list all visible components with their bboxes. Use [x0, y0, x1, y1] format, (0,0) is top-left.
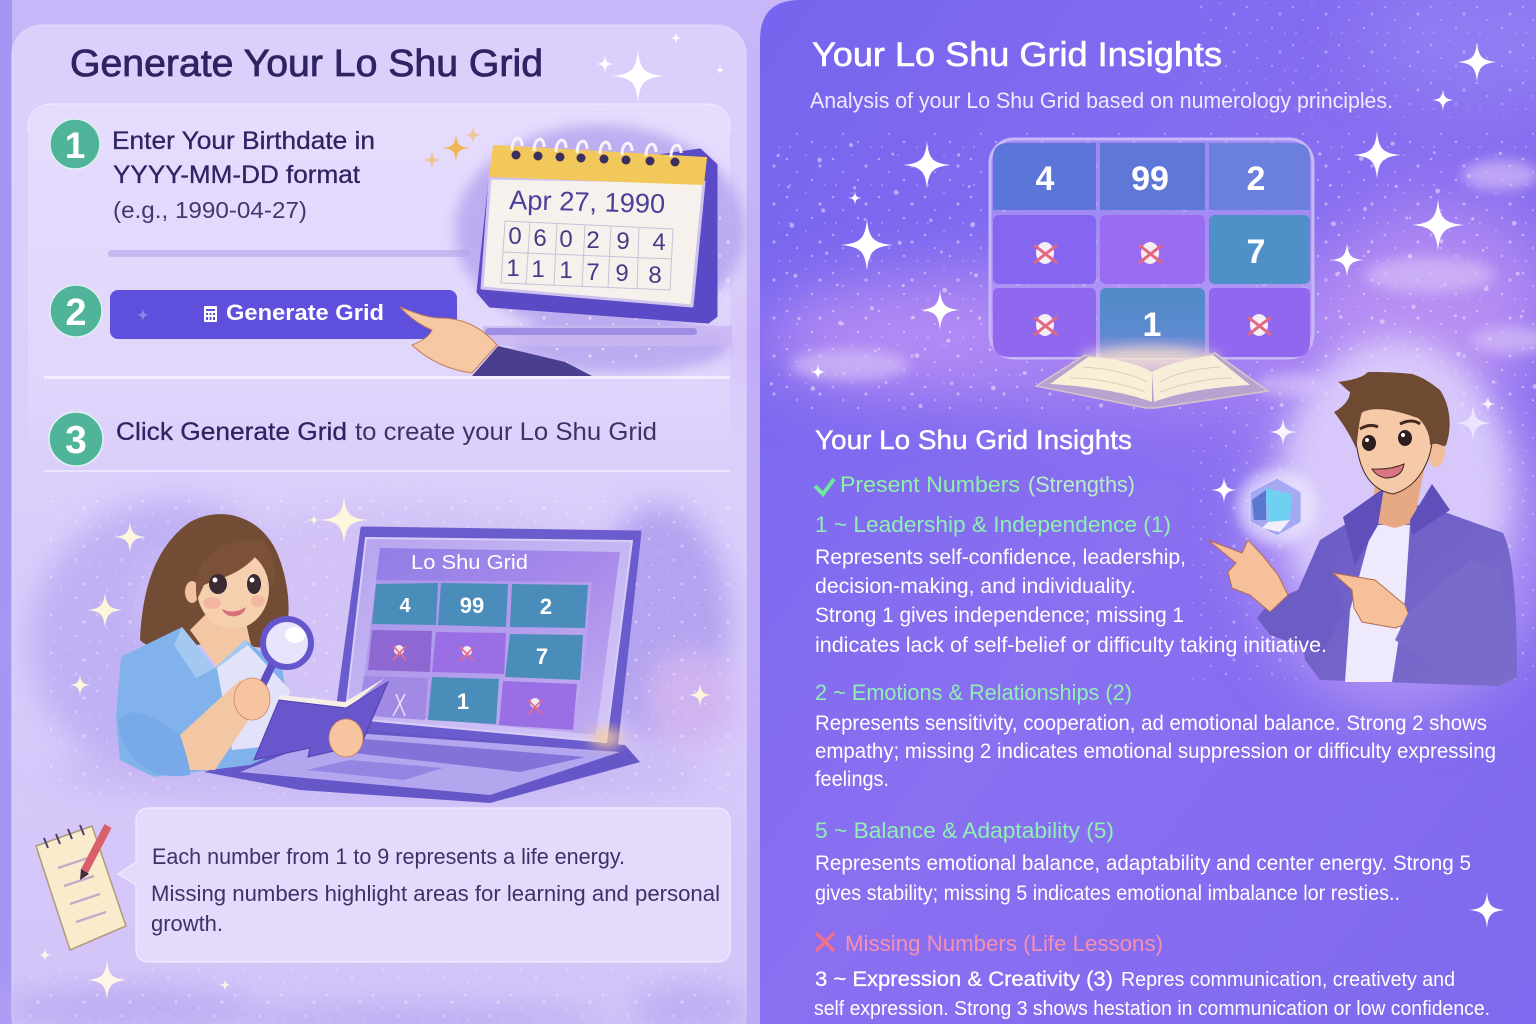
missing cell — [432, 632, 506, 674]
girl eyes — [209, 574, 261, 594]
panel subheading: Analysis of your Lo Shu Grid based on numerology principles. — [810, 88, 1393, 113]
number 5 insight — [815, 818, 1471, 905]
hair — [1334, 372, 1450, 448]
cell 4: 4 — [1036, 160, 1055, 198]
girl neck — [190, 615, 252, 668]
star dust — [770, 0, 1536, 680]
girl cheeks — [203, 595, 265, 609]
girl hand on magnifier — [234, 678, 270, 720]
background cloud — [30, 500, 735, 803]
book pages — [278, 678, 385, 708]
present cell 4 — [372, 583, 438, 625]
cell 1 — [1100, 288, 1205, 358]
number 5 text — [815, 852, 1471, 905]
left sleeve — [1257, 540, 1345, 653]
calendar digits: 1 — [531, 256, 545, 283]
pointing hand right — [1333, 573, 1412, 628]
jacket body — [1300, 505, 1517, 686]
small gold sparkles — [422, 126, 482, 170]
calendar digits: 0 — [559, 226, 573, 253]
cell 7 — [1209, 215, 1310, 284]
trackpad — [307, 760, 443, 780]
screen corner glow — [590, 728, 622, 748]
calendar digits: 8 — [648, 262, 662, 289]
calendar digits: 9 — [615, 260, 629, 287]
number 1 heading: 1 ~ Leadership & Independence (1) — [815, 512, 1171, 537]
section heading: Your Lo Shu Grid Insights — [815, 425, 1132, 455]
step 3 badge: 3 — [65, 419, 87, 462]
calendar ring holes — [512, 150, 680, 166]
grid frame — [362, 580, 592, 732]
laptop base — [204, 725, 640, 803]
calendar rings — [512, 138, 681, 157]
crystal cube — [1237, 469, 1317, 545]
cell 2 — [1209, 143, 1310, 210]
divider — [44, 470, 730, 472]
eyes — [1362, 430, 1412, 451]
present cell 99: 99 — [460, 593, 484, 618]
missing numbers label: Missing Numbers (Life Lessons) — [845, 931, 1163, 956]
laptop deck — [240, 732, 620, 795]
girl hair back — [140, 514, 289, 648]
missing cell row 3 right — [1209, 288, 1310, 357]
calendar digits: 0 — [508, 223, 522, 250]
calendar digits: 9 — [616, 228, 630, 255]
missing numbers heading — [816, 931, 1163, 956]
cell 99: 99 — [1131, 160, 1169, 198]
laptop lid — [335, 528, 640, 750]
present cell 2 — [510, 584, 588, 628]
girl ear — [185, 581, 199, 603]
book pages left — [1050, 357, 1152, 402]
number 5 text: gives stability; missing 5 indicates emotional imbalance lor resties.. — [815, 882, 1400, 905]
girl eye highlights — [212, 578, 254, 582]
pointing hand — [400, 307, 592, 376]
number 1 text: decision-making, and individuality. — [815, 575, 1136, 598]
girl white inner — [217, 645, 290, 750]
open book — [1036, 346, 1268, 408]
panel background — [12, 25, 746, 1024]
number 5 heading: 5 ~ Balance & Adaptability (5) — [815, 818, 1114, 843]
step 2 badge: 2 — [65, 292, 87, 334]
keyboard — [345, 738, 585, 772]
number 1 insight — [815, 512, 1327, 657]
number 2 heading: 2 ~ Emotions & Relationships (2) — [815, 680, 1132, 705]
present cell 99 — [438, 583, 508, 627]
face — [1355, 402, 1433, 494]
note line 3: growth. — [151, 911, 223, 936]
cell 7: 7 — [1247, 233, 1265, 271]
steps card — [28, 104, 730, 480]
number 3 insight — [814, 968, 1490, 1020]
note line 2: Missing numbers highlight areas for learning and personal — [151, 881, 720, 906]
step 1 badge — [50, 119, 100, 169]
present cell 1: 1 — [457, 689, 469, 714]
girl bangs — [196, 539, 275, 600]
present cell 4: 4 — [399, 595, 411, 617]
number 2 insight — [815, 680, 1496, 791]
calendar digits: 6 — [533, 225, 547, 252]
calendar number grid — [501, 221, 673, 290]
step 1 format: YYYY-MM-DD format — [113, 161, 360, 189]
number 3 text line 1: Repres communication, creativety and — [1121, 969, 1455, 991]
sparkles — [810, 42, 1505, 928]
calendar cloud dust — [480, 150, 740, 370]
dotted track — [483, 326, 732, 346]
missing cell row 3 left — [993, 288, 1096, 357]
eye highlights — [1365, 433, 1405, 442]
title: Generate Your Lo Shu Grid — [70, 43, 543, 85]
step 1 heading: Enter Your Birthdate in — [112, 127, 375, 155]
book glow — [1080, 346, 1220, 374]
screen inner — [360, 548, 620, 735]
step 1 — [50, 119, 470, 257]
step 2 badge — [50, 285, 102, 337]
title sparkles — [596, 32, 725, 102]
calendar header — [490, 146, 706, 184]
number 5 text: Represents emotional balance, adaptability and center energy. Strong 5 — [815, 852, 1471, 875]
panel: insights — [760, 0, 1536, 1024]
input line — [108, 250, 470, 257]
present numbers heading — [815, 472, 1135, 497]
step 3 emphasis: Click Generate Grid — [116, 418, 347, 446]
number 2 text — [815, 712, 1496, 791]
girl rolled sleeve — [118, 712, 190, 776]
calendar digits: 1 — [506, 255, 520, 282]
note block — [36, 808, 730, 962]
calendar page — [482, 178, 704, 306]
insights section — [814, 425, 1496, 1020]
step 1 badge: 1 — [65, 125, 85, 166]
calendar digits: 2 — [586, 227, 600, 254]
missing cell — [499, 681, 577, 730]
present cell 7 — [505, 634, 583, 680]
brows — [1360, 421, 1420, 429]
cell 4 — [993, 143, 1096, 210]
icon: notepad and pencil — [36, 825, 126, 950]
panel: generate your grid — [0, 25, 750, 1024]
number 1 text — [815, 546, 1327, 657]
cell 2: 2 — [1247, 160, 1265, 198]
girl shirt — [116, 627, 295, 777]
panel background — [760, 0, 1536, 1024]
missing cell — [368, 630, 432, 672]
girl arm — [180, 680, 262, 770]
number 1 text: indicates lack of self-belief or difficulty taking initiative. — [815, 634, 1327, 657]
present cell 1 — [428, 677, 499, 724]
book page lines — [1070, 367, 1232, 392]
screen title: Lo Shu Grid — [411, 552, 528, 574]
step 2 — [50, 285, 732, 376]
calendar illustration — [422, 125, 745, 373]
number 2 text: Represents sensitivity, cooperation, ad emotional balance. Strong 2 shows — [815, 712, 1487, 735]
icon: check mark — [815, 479, 834, 494]
present cell 7: 7 — [536, 644, 548, 669]
calendar digits — [506, 223, 666, 289]
lo shu grid — [990, 139, 1313, 358]
button label: Generate Grid — [226, 300, 384, 325]
step 3 text: to create your Lo Shu Grid — [355, 418, 657, 446]
girl face — [197, 549, 269, 629]
book pages right — [1152, 355, 1250, 402]
calendar digits: 7 — [586, 259, 600, 286]
step 3 — [49, 412, 657, 466]
book — [254, 678, 388, 760]
left edge strip — [0, 0, 12, 1024]
cell 99 — [1100, 143, 1205, 210]
divider — [44, 376, 730, 379]
icon: red cross — [816, 933, 834, 951]
mouth — [1372, 464, 1404, 478]
calculator icon — [204, 306, 217, 322]
panel heading: Your Lo Shu Grid Insights — [812, 36, 1222, 74]
calendar cloud — [455, 125, 745, 373]
man illustration — [1208, 340, 1517, 686]
nebula glow — [760, 0, 1536, 710]
small clouds — [790, 160, 1536, 397]
step 1 example: (e.g., 1990-04-27) — [113, 197, 307, 223]
present numbers label: Present Numbers — [840, 472, 1020, 497]
t-shirt — [1345, 525, 1410, 682]
missing cell faded — [358, 676, 428, 720]
calendar digits: 4 — [652, 229, 666, 256]
present cell 2: 2 — [540, 594, 552, 619]
background sparkle dots — [50, 500, 730, 800]
number 2 text: feelings. — [815, 768, 889, 791]
book cover — [1036, 353, 1268, 408]
number 3 text line 2: self expression. Strong 3 shows hestation in communication or low confidence. — [814, 998, 1490, 1020]
pointing hand left — [1208, 540, 1288, 612]
girl collar — [174, 627, 252, 678]
girl hand on book — [329, 719, 363, 757]
neck — [1373, 465, 1425, 528]
note line 1: Each number from 1 to 9 represents a life energy. — [152, 844, 625, 869]
step 3 badge — [49, 412, 103, 466]
cell 1: 1 — [1143, 306, 1161, 344]
number 1 text: Represents self-confidence, leadership, — [815, 546, 1186, 569]
laptop screen — [345, 538, 632, 742]
calendar back — [478, 150, 716, 322]
screen grid — [358, 580, 592, 732]
sparkles — [69, 496, 712, 707]
number 2 text: empathy; missing 2 indicates emotional suppression or difficulty expressing — [815, 740, 1496, 763]
calendar date: Apr 27, 1990 — [509, 185, 666, 219]
collar — [1343, 484, 1450, 565]
number 3 heading: 3 ~ Expression & Creativity (3) — [815, 968, 1113, 991]
button star — [136, 308, 150, 322]
girl mouth — [222, 607, 246, 616]
calendar digits: 1 — [559, 257, 573, 284]
magnifier — [260, 619, 311, 690]
missing cell row 2 left — [993, 215, 1096, 284]
note card — [118, 808, 730, 962]
grid frame — [990, 139, 1313, 358]
strengths label: (Strengths) — [1028, 472, 1135, 497]
bottom left clouds and sparkles — [0, 948, 750, 1024]
man glow — [1280, 340, 1510, 640]
illustration: girl and laptop — [30, 496, 735, 803]
generate grid button — [110, 290, 457, 339]
right sleeve — [1395, 560, 1517, 680]
ear — [1427, 433, 1445, 467]
book cover — [254, 682, 388, 760]
missing cell row 2 center — [1100, 215, 1205, 284]
number 1 text: Strong 1 gives independence; missing 1 — [815, 604, 1184, 627]
